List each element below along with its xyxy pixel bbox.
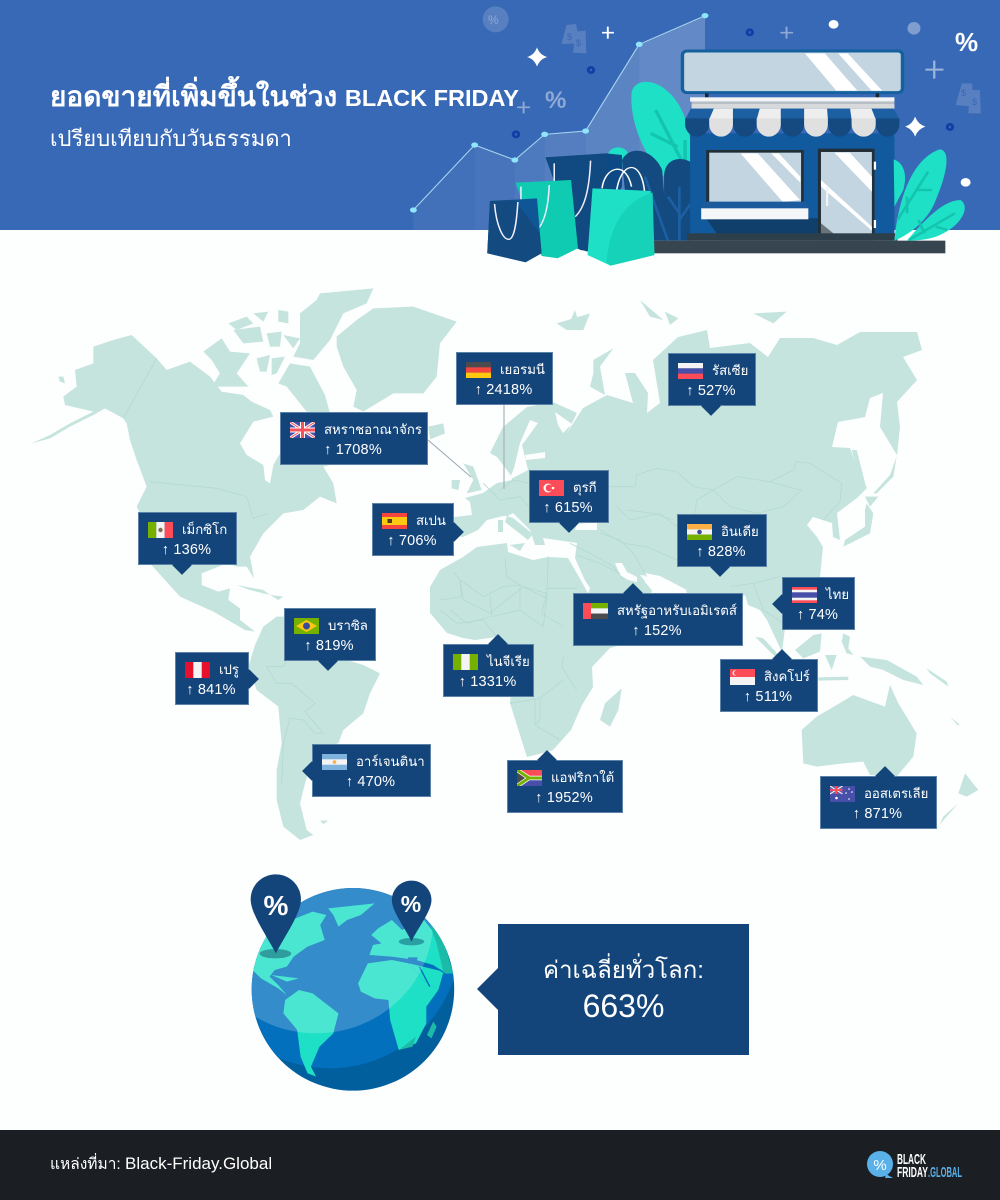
shop building — [653, 51, 945, 253]
callout: mexico — [138, 512, 237, 565]
callout: nigeria — [443, 644, 534, 697]
logo — [867, 1151, 962, 1181]
plant behind shop — [607, 82, 693, 241]
africa — [430, 543, 650, 757]
right pin percent: % — [401, 891, 421, 917]
header band — [0, 0, 1000, 230]
callout: south africa: ↑ 1952% — [535, 790, 593, 806]
faint percent mark: % — [545, 87, 566, 114]
faint tag dollar signs: $ — [567, 32, 572, 42]
decorative sparkles and dots — [483, 6, 981, 187]
callout: brazil: บราซิล — [328, 618, 368, 633]
italy and mediterranean islands — [505, 516, 533, 540]
flag: spain — [382, 513, 407, 529]
callout: australia — [820, 776, 937, 829]
callout: brazil: ↑ 819% — [304, 638, 354, 654]
flag: singapore — [730, 669, 755, 685]
callout: brazil — [284, 608, 376, 661]
header illustration: chart, shop, bags — [410, 6, 981, 266]
callout: turkey — [529, 470, 609, 523]
white percent mark: % — [955, 27, 978, 57]
flag: brazil — [294, 618, 319, 634]
callout: united arab emirates — [573, 593, 743, 646]
callout: australia: ออสเตรเลีย — [864, 786, 928, 801]
callout: south africa: แอฟริกาใต้ — [551, 770, 614, 785]
flag: india — [687, 524, 712, 540]
callout: singapore — [720, 659, 818, 712]
flag: germany — [466, 362, 491, 378]
flag: peru — [185, 662, 210, 678]
shopping bags — [487, 153, 654, 266]
callout: argentina: ↑ 470% — [346, 774, 395, 790]
callout: united kingdom: ↑ 1708% — [324, 442, 382, 458]
left pin percent: % — [264, 890, 289, 921]
callout: mexico: เม็กซิโก — [182, 522, 227, 537]
flag: turkey — [539, 480, 564, 496]
flag: united arab emirates — [583, 603, 608, 619]
logo wordmark — [897, 1151, 962, 1181]
callout: india: อินเดีย — [721, 524, 759, 539]
callout: australia: ↑ 871% — [853, 806, 902, 822]
faint badge percent: % — [488, 13, 499, 27]
callout: peru — [175, 652, 249, 705]
rising line chart — [410, 13, 708, 230]
callout: germany: ↑ 2418% — [475, 382, 532, 398]
footer bar — [0, 1130, 1000, 1200]
left pin — [251, 874, 301, 953]
pin shadows — [260, 949, 291, 958]
faint tag dollar signs: $ — [961, 88, 966, 98]
title: ยอดขายที่เพิ่มขึ้นในช่วง BLACK FRIDAY — [50, 81, 519, 112]
flag: south africa — [517, 770, 542, 786]
globe — [252, 888, 454, 1091]
callout: russia — [668, 353, 756, 406]
callout: united arab emirates: ↑ 152% — [632, 623, 682, 639]
callout: thailand: ↑ 74% — [797, 607, 838, 623]
callout: russia: รัสเซีย — [712, 363, 748, 378]
callout: south africa — [507, 760, 623, 813]
russian arctic islands — [557, 300, 897, 547]
leader line: germany — [503, 405, 505, 489]
logo icon: % — [873, 1157, 887, 1174]
callout: turkey: ↑ 615% — [543, 500, 593, 516]
logo wordmark: FRIDAY — [897, 1164, 928, 1181]
callout: spain: สเปน — [416, 513, 446, 528]
flag: australia — [830, 786, 855, 802]
southeast asia, australia, madagascar and new zealand — [600, 633, 978, 832]
callout: thailand — [782, 577, 855, 630]
globe with location pins — [250, 874, 454, 1091]
logo wordmark: BLACK — [897, 1151, 926, 1168]
callout: singapore: ↑ 511% — [744, 689, 792, 705]
callout: nigeria: ไนจีเรีย — [487, 654, 530, 669]
callout: global average — [498, 924, 749, 1055]
callout: united arab emirates: สหรัฐอาหรับเอมิเรตส์ — [617, 603, 737, 618]
leader line: united kingdom — [428, 440, 471, 477]
flag: mexico — [148, 522, 173, 538]
callout: germany — [456, 352, 553, 405]
callout: spain: ↑ 706% — [387, 533, 437, 549]
world map — [32, 288, 978, 840]
faint tag dollar signs — [567, 32, 977, 107]
callout: argentina: อาร์เจนตินา — [356, 754, 425, 769]
flag: nigeria — [453, 654, 478, 670]
eurasia — [445, 330, 922, 652]
callout: united kingdom: สหราชอาณาจักร — [324, 422, 422, 437]
right pin — [392, 881, 431, 942]
callout: argentina — [312, 744, 431, 797]
flag: thailand — [792, 587, 817, 603]
central america islands and south america — [237, 585, 380, 840]
plant right of shop — [894, 149, 965, 241]
callout: spain — [372, 503, 454, 556]
flag: argentina — [322, 754, 347, 770]
callout: thailand: ไทย — [826, 587, 849, 602]
callout: germany: เยอรมนี — [500, 362, 545, 377]
callout: peru: เปรู — [219, 662, 239, 677]
average label: ค่าเฉลี่ยทั่วโลก: — [543, 957, 704, 984]
callout: india — [677, 514, 767, 567]
greenland — [337, 307, 580, 493]
country borders — [123, 358, 842, 783]
callout: peru: ↑ 841% — [186, 682, 236, 698]
source text: แหล่งที่มา: Black-Friday.Global — [50, 1154, 272, 1173]
callout: nigeria: ↑ 1331% — [459, 674, 516, 690]
faint tag dollar signs: $ — [576, 38, 581, 48]
callout: mexico: ↑ 136% — [162, 542, 211, 558]
subtitle: เปรียบเทียบกับวันธรรมดา — [50, 126, 292, 151]
callout: russia: ↑ 527% — [686, 383, 736, 399]
callout: india: ↑ 828% — [696, 544, 746, 560]
faint tag dollar signs: $ — [972, 97, 977, 107]
average value: 663% — [583, 988, 664, 1024]
flag: russia — [678, 363, 703, 379]
continents — [252, 903, 453, 1077]
inland seas — [510, 412, 687, 594]
north america — [32, 288, 373, 632]
callout: turkey: ตุรกี — [573, 480, 597, 495]
callout: singapore: สิงคโปร์ — [764, 669, 810, 684]
callout: united kingdom — [280, 412, 428, 465]
flag: united kingdom — [290, 422, 315, 438]
